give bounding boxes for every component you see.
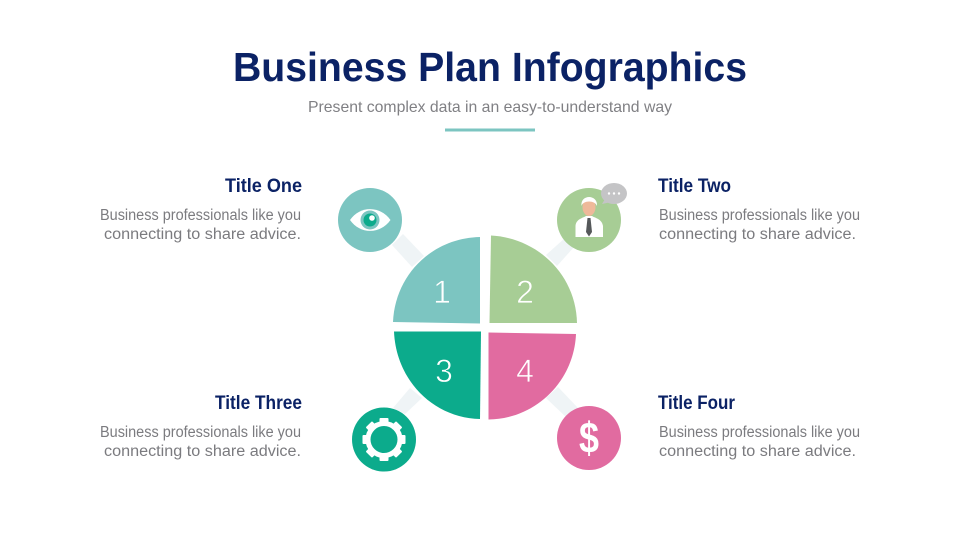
number 2: 2 (516, 274, 534, 310)
number 1: 1 (433, 274, 451, 310)
text block: title one: connecting to share advice. (104, 226, 301, 243)
text block: title three: connecting to share advice. (104, 443, 301, 460)
icon: eye (338, 188, 402, 252)
text block: title one (100, 176, 302, 243)
text block: title two: Title Two (658, 176, 731, 197)
connector: two (546, 238, 574, 266)
connector: three (393, 388, 422, 414)
text block: title three: Title Three (215, 393, 302, 414)
text block: title four: connecting to share advice. (659, 443, 856, 460)
number 4: 4 (516, 353, 534, 389)
quadrant 1 (393, 237, 480, 324)
quadrant 2 (490, 236, 577, 323)
number 3: 3 (435, 353, 453, 389)
title underline (445, 128, 535, 132)
quadrant 4 (488, 332, 576, 420)
icon: gear (352, 408, 416, 472)
text block: title one: Title One (225, 176, 302, 197)
text block: title four (658, 393, 860, 460)
text block: title two: Business professionals like you (659, 207, 860, 224)
text block: title three (100, 393, 302, 460)
text block: title four: Title Four (658, 393, 736, 414)
text block: title three: Business professionals like you (100, 424, 301, 441)
text block: title two: connecting to share advice. (659, 226, 856, 243)
icon: dollar: $ (579, 414, 599, 463)
connector: one (392, 234, 424, 267)
subtitle: Present complex data in an easy-to-understand way (308, 99, 672, 116)
text block: title two (658, 176, 860, 243)
quadrant 3 (394, 332, 481, 419)
text block: title one: Business professionals like you (100, 207, 301, 224)
icon: business person with speech bubble (557, 183, 627, 252)
title: Business Plan Infographics (233, 44, 747, 90)
speech bubble (601, 183, 627, 204)
icon: dollar (557, 406, 621, 470)
text block: title four: Business professionals like you (659, 424, 860, 441)
connector: four (546, 387, 578, 418)
